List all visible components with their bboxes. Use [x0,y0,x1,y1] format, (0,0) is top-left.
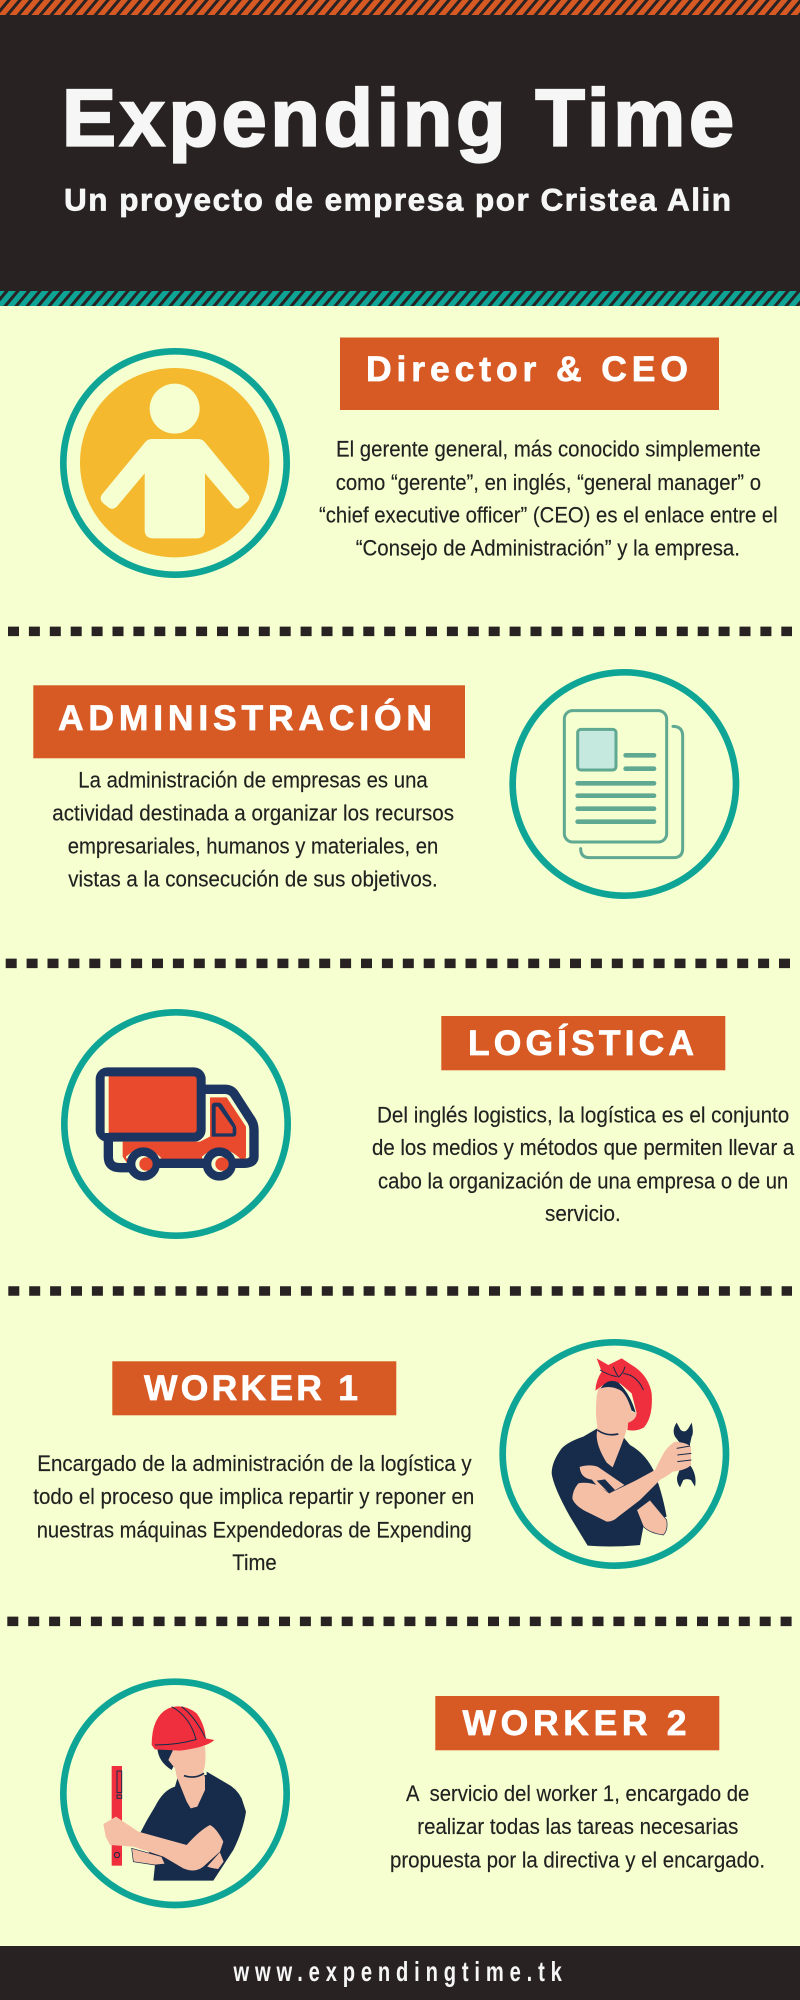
text: administración description: vistas a la consecución de sus objetivos. [68,867,438,892]
text: administración description: empresariales, humanos y materiales, en [68,833,438,858]
icon: delivery truck in circle [64,1012,288,1236]
header band [0,0,800,306]
text: director description: “Consejo de Administración” y la empresa. [356,536,740,561]
icon: woman worker with wrench in circle [503,1342,726,1566]
icon: person in circle [63,351,287,575]
text: worker 1 description: Time [232,1550,277,1575]
heading: ADMINISTRACIÓN: ADMINISTRACIÓN [58,698,432,738]
text: worker 1 description: nuestras máquinas Expendedoras de Expending [37,1517,472,1542]
text: worker 1 description: todo el proceso que implica repartir y reponer en [33,1484,474,1509]
panel: worker 2 [63,1682,765,1905]
text: logística description: servicio. [545,1201,621,1226]
icon: documents in circle [513,672,736,896]
text: worker 1 description: Encargado de la administración de la logística y [37,1451,472,1476]
text: logística description [372,1102,795,1226]
title: Expending Time [62,74,734,164]
text: director description: El gerente general, más conocido simplemente [336,437,761,462]
text: administración description [52,767,454,892]
heading: WORKER 2 [435,1696,719,1750]
heading: Director & CEO [340,338,719,410]
heading: WORKER 2: WORKER 2 [462,1703,686,1743]
heading: LOGÍSTICA [441,1016,725,1070]
text: director description [319,437,778,561]
panel: director and CEO [63,338,778,575]
heading: WORKER 1 [112,1361,396,1415]
text: worker 2 description: realizar todas las tareas necesarias [417,1814,738,1839]
icon: man with helmet and level in circle [63,1682,287,1905]
heading: WORKER 1: WORKER 1 [144,1368,358,1408]
heading: Director & CEO: Director & CEO [366,349,688,389]
footer website: www.expendingtime.tk [233,1957,562,1988]
text: worker 2 description [390,1781,765,1872]
text: worker 2 description: propuesta por la directiva y el encargado. [390,1847,765,1872]
footer band [0,1946,800,2000]
text: administración description: actividad destinada a organizar los recursos [52,801,454,826]
panel: worker 1 [33,1342,726,1575]
text: administración description: La administración de empresas es una [78,767,428,792]
text: director description: como “gerente”, en inglés, “general manager” o [336,470,761,495]
panel: logística [64,1012,795,1236]
text: worker 2 description: A servicio del worker 1, encargado de [406,1781,749,1806]
subtitle: Un proyecto de empresa por Cristea Alin [64,182,731,218]
panel: administración [33,672,736,896]
text: worker 1 description [33,1451,474,1575]
heading: ADMINISTRACIÓN [33,685,465,758]
heading: LOGÍSTICA: LOGÍSTICA [468,1023,694,1063]
